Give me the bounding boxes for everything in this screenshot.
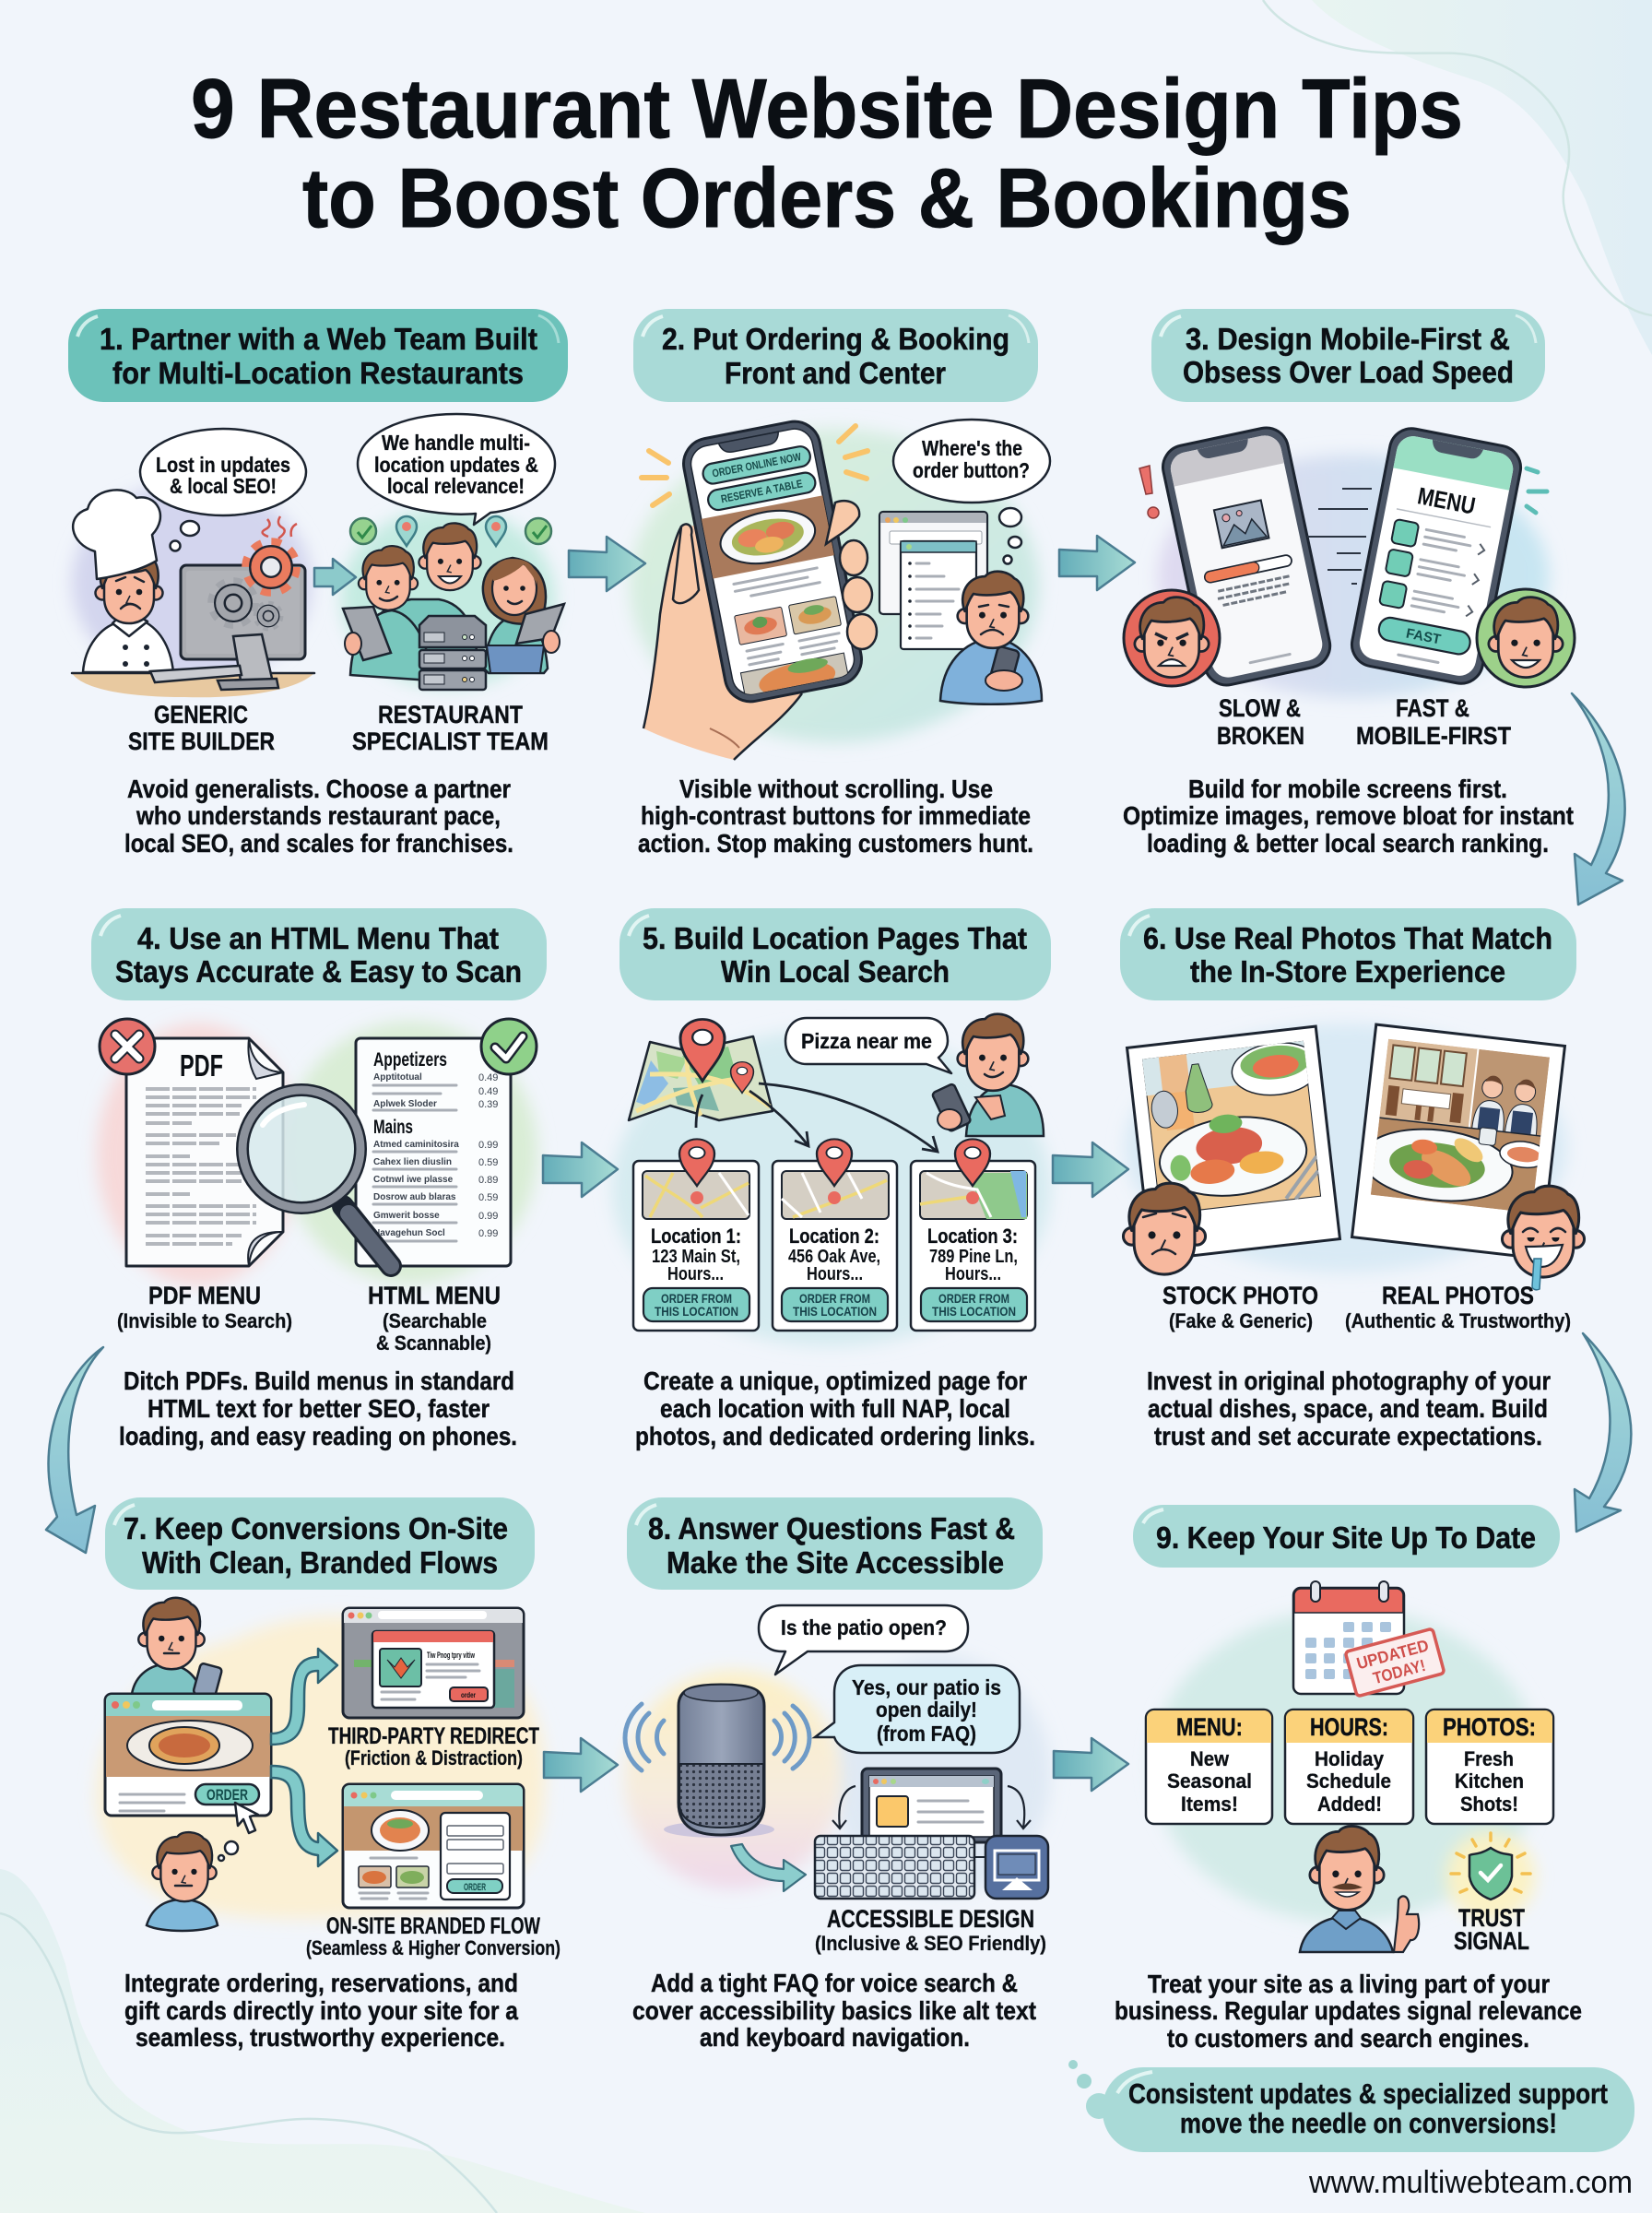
location card 1: Hours...	[667, 1264, 724, 1284]
heading pill 2	[633, 309, 1038, 402]
illustration: HTML menu: 0.59	[478, 1192, 498, 1203]
illustration: on-site branded flow window	[343, 1784, 524, 1908]
labels: third-party redirect: THIRD-PARTY REDIRECT	[328, 1723, 539, 1749]
location card 3: 789 Pine Ln,	[929, 1247, 1018, 1267]
icon: calendar with updated stamp: UPDATED	[1354, 1636, 1431, 1673]
body text 4: loading, and easy reading on phones.	[119, 1422, 517, 1450]
card: photos update	[1426, 1710, 1553, 1824]
corner decoration: bottom left	[0, 1869, 645, 2213]
heading pill 7	[105, 1497, 535, 1590]
body text 6: Invest in original photography of your	[1147, 1367, 1551, 1395]
labels: stock vs real	[1162, 1282, 1571, 1332]
labels: slow vs fast: BROKEN	[1217, 722, 1304, 750]
labels: slow vs fast: MOBILE-FIRST	[1356, 722, 1511, 750]
heading pill 1: 1. Partner with a Web Team Built	[100, 322, 537, 356]
body text 4	[119, 1367, 517, 1450]
labels: stock vs real: REAL PHOTOS	[1382, 1282, 1534, 1309]
body text 5	[635, 1367, 1035, 1450]
illustration: map with pins	[629, 1019, 773, 1120]
body text 1: who understands restaurant pace,	[136, 801, 501, 830]
body text 6	[1147, 1367, 1551, 1450]
title: to Boost Orders & Bookings	[302, 152, 1351, 245]
labels: slow vs fast	[1217, 694, 1511, 750]
illustration: HTML menu: 0.99	[478, 1228, 498, 1239]
heading pill 5: Win Local Search	[721, 954, 950, 988]
illustration: HTML menu: Dosrow aub blaras	[373, 1192, 456, 1202]
card: photos update: Shots!	[1460, 1793, 1518, 1816]
illustration: fast mobile-first phone: MENU	[1415, 481, 1478, 520]
illustration: HTML menu: 0.89	[478, 1175, 498, 1186]
body text 5: each location with full NAP, local	[660, 1394, 1010, 1423]
body text 6: trust and set accurate expectations.	[1154, 1422, 1542, 1450]
label: trust signal: SIGNAL	[1454, 1927, 1529, 1955]
labels: third-party redirect: (Friction & Distraction)	[345, 1746, 523, 1769]
speech bubble: lost in updates: & local SEO!	[170, 474, 277, 498]
labels: generic vs specialist: SPECIALIST TEAM	[352, 728, 549, 755]
heading pill 9	[1133, 1505, 1560, 1568]
illustration: smart speaker	[625, 1685, 809, 1838]
heading pill 3	[1151, 309, 1545, 402]
body text 1: Avoid generalists. Choose a partner	[127, 775, 511, 803]
card: menu update: Seasonal	[1167, 1769, 1252, 1793]
location card 3	[911, 1139, 1035, 1331]
icon: red x	[100, 1019, 155, 1074]
labels: PDF vs HTML: (Invisible to Search)	[117, 1309, 292, 1332]
illustration: person searching on phone	[932, 1014, 1044, 1136]
curved arrow: step 4 to 7	[46, 1347, 103, 1553]
body text 6: actual dishes, space, and team. Build	[1148, 1394, 1548, 1423]
card: menu update: MENU:	[1176, 1713, 1243, 1741]
illustration: customer with phone	[132, 1598, 222, 1698]
title	[191, 63, 1463, 245]
icon: magnifying glass	[242, 1090, 391, 1266]
heading pill 5: 5. Build Location Pages That	[643, 921, 1027, 955]
icon: trust shield	[1451, 1833, 1530, 1899]
body text 1	[124, 775, 513, 858]
illustration: HTML menu: Mains	[373, 1117, 413, 1138]
heading pill 2: Front and Center	[725, 356, 946, 390]
speech bubble: pizza near me	[785, 1018, 951, 1073]
speech bubble: yes the patio is open: Yes, our patio is	[852, 1675, 1001, 1699]
body text 4: Ditch PDFs. Build menus in standard	[124, 1367, 514, 1395]
location card 3: THIS LOCATION	[932, 1304, 1016, 1319]
illustration: PDF menu document	[126, 1038, 283, 1266]
location card 1: 123 Main St,	[652, 1247, 740, 1267]
labels: stock vs real: (Authentic & Trustworthy)	[1345, 1309, 1571, 1332]
illustration: HTML menu: Gmwerit bosse	[373, 1211, 440, 1221]
heading pill 4	[91, 908, 547, 1000]
heading pill 4: 4. Use an HTML Menu That	[137, 921, 499, 955]
arrow: speaker to accessible design	[731, 1844, 806, 1891]
speech bubble: lost in updates: Lost in updates	[156, 453, 290, 477]
panel 7	[105, 1497, 560, 2052]
illustration: restaurant specialist team	[343, 516, 564, 690]
body text 3: Optimize images, remove bloat for instant	[1123, 801, 1574, 830]
heading pill 2: 2. Put Ordering & Booking	[662, 322, 1009, 356]
panel 3	[1123, 309, 1575, 858]
labels: slow vs fast: SLOW &	[1219, 694, 1301, 722]
speech bubble: we handle multi-location: local relevance!	[387, 474, 525, 498]
curved arrow: step 6 to 9	[1575, 1333, 1631, 1532]
illustration: third-party redirect window	[343, 1608, 524, 1718]
speech bubble: yes the patio is open: (from FAQ)	[877, 1722, 976, 1746]
illustration: hand holding phone: RESERVE A TABLE	[720, 477, 804, 505]
body text 7: Integrate ordering, reservations, and	[124, 1969, 518, 1997]
location card 1: Location 1:	[651, 1225, 741, 1248]
labels: generic vs specialist: RESTAURANT	[378, 701, 523, 728]
illustration: HTML menu: Cotnwl iwe plasse	[373, 1175, 454, 1185]
illustration: accessible design devices	[815, 1769, 1048, 1899]
illustration: HTML menu: 0.99	[478, 1211, 498, 1222]
body text 4: HTML text for better SEO, faster	[148, 1394, 490, 1423]
labels: PDF vs HTML: HTML MENU	[368, 1282, 501, 1309]
body text 2: action. Stop making customers hunt.	[638, 829, 1033, 858]
panel 5	[620, 908, 1051, 1450]
illustration: on-site branded flow window: ORDER	[464, 1882, 486, 1893]
illustration: restaurant page with order button: ORDER	[206, 1786, 248, 1804]
arrows: map to location cards	[696, 1083, 938, 1152]
illustration: HTML menu	[356, 1038, 511, 1266]
label: trust signal	[1454, 1904, 1529, 1955]
labels: generic vs specialist: SITE BUILDER	[128, 728, 275, 755]
arrow: step 4 to 5	[543, 1142, 618, 1197]
icon: calendar with updated stamp	[1293, 1581, 1445, 1697]
body text 7: seamless, trustworthy experience.	[136, 2023, 505, 2052]
body text 2: Visible without scrolling. Use	[679, 775, 993, 803]
labels: stock vs real: STOCK PHOTO	[1162, 1282, 1318, 1309]
callout: consistent updates: move the needle on conversions!	[1180, 2107, 1557, 2139]
speech bubble: where's the order button: Where's the	[922, 436, 1022, 460]
labels: third-party redirect	[328, 1723, 539, 1769]
heading pill 7: 7. Keep Conversions On-Site	[124, 1511, 508, 1545]
heading pill 1	[68, 309, 568, 402]
heading pill 3: 3. Design Mobile-First &	[1186, 322, 1510, 356]
body text 3: Build for mobile screens first.	[1188, 775, 1507, 803]
labels: PDF vs HTML: PDF MENU	[148, 1282, 261, 1309]
illustration: stock photo print	[1127, 1026, 1339, 1260]
panel 1	[68, 309, 568, 858]
body text 8: cover accessibility basics like alt text	[632, 1996, 1036, 2025]
labels: generic vs specialist	[128, 701, 549, 755]
card: hours update: Added!	[1317, 1793, 1382, 1816]
illustration: HTML menu: Aplwek Sloder	[373, 1099, 437, 1109]
labels: stock vs real: (Fake & Generic)	[1169, 1309, 1313, 1332]
labels: PDF vs HTML: (Searchable	[383, 1309, 487, 1332]
illustration: third-party redirect window: order	[461, 1691, 476, 1699]
heading pill 3: Obsess Over Load Speed	[1183, 355, 1514, 389]
body text 2: high-contrast buttons for immediate	[641, 801, 1031, 830]
illustration: HTML menu: 0.49	[478, 1072, 498, 1083]
arrow: step 1 to 2	[569, 537, 645, 591]
heading pill 8: Make the Site Accessible	[667, 1545, 1004, 1580]
arrow: step 2 to 3	[1059, 536, 1135, 590]
location card 2	[773, 1139, 897, 1331]
labels: PDF vs HTML	[117, 1282, 501, 1355]
speech bubble: is the patio open: Is the patio open?	[781, 1615, 947, 1639]
location card 3: Location 3:	[927, 1225, 1018, 1248]
panel 2	[633, 309, 1050, 858]
icon: green check	[481, 1019, 537, 1074]
body text 3: loading & better local search ranking.	[1147, 829, 1549, 858]
illustration: HTML menu: Apptitotual	[373, 1072, 422, 1083]
body text 1: local SEO, and scales for franchises.	[124, 829, 513, 858]
flow arrows	[271, 1649, 337, 1866]
labels: on-site branded flow: (Seamless & Higher Conversion)	[306, 1936, 560, 1959]
card: photos update: Kitchen	[1455, 1769, 1524, 1793]
website url: www.multiwebteam.com	[1308, 2165, 1633, 2200]
location card 3: ORDER FROM	[938, 1291, 1009, 1306]
heading pill 1: for Multi-Location Restaurants	[112, 356, 524, 390]
callout: consistent updates	[1068, 2060, 1634, 2152]
body text 3	[1123, 775, 1574, 858]
illustration: third-party redirect window: Tiw Pnog tpry vitiw	[427, 1651, 476, 1660]
body text 7: gift cards directly into your site for a	[124, 1996, 518, 2025]
card: menu update	[1146, 1710, 1272, 1824]
card: hours update	[1285, 1710, 1413, 1824]
labels: PDF vs HTML: & Scannable)	[376, 1331, 491, 1355]
body text 8: and keyboard navigation.	[700, 2023, 970, 2052]
location card 3: Hours...	[945, 1264, 1001, 1284]
arrow: generic to specialist	[314, 559, 356, 595]
illustration: HTML menu: 0.99	[478, 1140, 498, 1151]
icon: calendar with updated stamp: TODAY!	[1371, 1656, 1427, 1687]
card: hours update: Holiday	[1315, 1747, 1385, 1770]
heading pill 4: Stays Accurate & Easy to Scan	[115, 954, 522, 988]
illustration: thinking customer	[147, 1832, 238, 1931]
watercolor blobs behind illustrations	[72, 429, 1567, 1923]
body text 9	[1115, 1970, 1582, 2053]
illustration: restaurant page with order button	[105, 1694, 271, 1833]
speech bubble: where's the order button: order button?	[913, 458, 1030, 482]
illustration: confused customer with cluttered site	[879, 512, 1042, 704]
face: delighted with real photos	[1502, 1186, 1585, 1290]
illustration: HTML menu: 0.59	[478, 1157, 498, 1168]
speech bubble: is the patio open	[759, 1605, 968, 1675]
speech bubble: we handle multi-location: location updates &	[374, 453, 538, 477]
illustration: HTML menu: Atmed caminitosira	[373, 1140, 459, 1150]
arrow: step 5 to 6	[1053, 1142, 1128, 1197]
heading pill 6: the In-Store Experience	[1190, 954, 1505, 988]
location card 2: Hours...	[807, 1264, 863, 1284]
body text 9: Treat your site as a living part of your	[1148, 1970, 1550, 1998]
location card 2: ORDER FROM	[799, 1291, 870, 1306]
illustration: HTML menu: Navagehun Socl	[373, 1228, 445, 1238]
curved arrow: step 3 to 6	[1572, 693, 1625, 905]
heading pill 7: With Clean, Branded Flows	[142, 1545, 498, 1580]
heading pill 5	[620, 908, 1051, 1000]
body text 2	[638, 775, 1033, 858]
card: hours update: HOURS:	[1310, 1713, 1388, 1741]
illustration: HTML menu: Cahex lien diuslin	[373, 1157, 452, 1167]
body text 5: photos, and dedicated ordering links.	[635, 1422, 1035, 1450]
illustration: PDF menu document: PDF	[180, 1048, 223, 1083]
heading pill 8	[627, 1497, 1043, 1590]
card: menu update: New	[1190, 1747, 1230, 1770]
illustration: HTML menu: 0.49	[478, 1086, 498, 1097]
speech bubble: we handle multi-location: We handle multi-	[382, 431, 530, 455]
speech bubble: yes the patio is open: open daily!	[876, 1698, 977, 1722]
illustration: HTML menu: 0.39	[478, 1099, 498, 1110]
body text 5: Create a unique, optimized page for	[643, 1367, 1027, 1395]
speech bubble: we handle multi-location	[358, 414, 555, 525]
labels: slow vs fast: FAST &	[1396, 694, 1469, 722]
illustration: chef with generic site builder	[72, 490, 314, 697]
location card 2: 456 Oak Ave,	[788, 1247, 880, 1267]
panel 6	[1120, 908, 1585, 1450]
labels: generic vs specialist: GENERIC	[154, 701, 248, 728]
body text 9: business. Regular updates signal relevance	[1115, 1996, 1582, 2025]
arrow: step 8 to 9	[1054, 1738, 1128, 1791]
illustration: fast mobile-first phone	[1348, 425, 1575, 687]
location card 1	[633, 1139, 759, 1331]
speech bubble: yes the patio is open	[815, 1665, 1020, 1753]
speech bubble: lost in updates	[140, 429, 306, 551]
heading pill 6: 6. Use Real Photos That Match	[1143, 921, 1552, 955]
illustration: real photo print	[1352, 1024, 1564, 1259]
illustration: HTML menu: Appetizers	[373, 1049, 447, 1071]
card: hours update: Schedule	[1306, 1769, 1391, 1793]
title: 9 Restaurant Website Design Tips	[191, 63, 1463, 156]
illustration: fast mobile-first phone: FAST	[1405, 625, 1442, 647]
speech bubble: pizza near me: Pizza near me	[801, 1029, 932, 1053]
card: menu update: Items!	[1181, 1793, 1238, 1816]
speech bubble: where's the order button	[893, 420, 1050, 564]
labels: accessible design: ACCESSIBLE DESIGN	[827, 1905, 1034, 1933]
labels: on-site branded flow	[306, 1913, 560, 1959]
card: photos update: Fresh	[1464, 1747, 1514, 1770]
heading pill 8: 8. Answer Questions Fast &	[648, 1511, 1015, 1545]
illustration: owner thumbs up	[1300, 1826, 1419, 1952]
card: photos update: PHOTOS:	[1443, 1713, 1536, 1741]
labels: accessible design	[815, 1905, 1046, 1955]
location card 2: Location 2:	[789, 1225, 879, 1248]
illustration: hand holding phone: ORDER ONLINE NOW	[711, 450, 803, 480]
corner decoration: top right	[1263, 0, 1652, 355]
panel 9	[1068, 1505, 1634, 2200]
labels: on-site branded flow: ON-SITE BRANDED FLOW	[326, 1913, 540, 1939]
heading pill 6	[1120, 908, 1576, 1000]
illustration: slow broken phone	[1124, 424, 1372, 689]
body text 7	[124, 1969, 518, 2052]
label: trust signal: TRUST	[1458, 1904, 1525, 1932]
body text 8: Add a tight FAQ for voice search &	[651, 1969, 1018, 1997]
illustration: hand holding phone	[642, 417, 877, 760]
panel 8	[625, 1497, 1048, 2052]
labels: accessible design: (Inclusive & SEO Friendly)	[815, 1932, 1046, 1955]
heading pill 9: 9. Keep Your Site Up To Date	[1156, 1521, 1536, 1555]
panel 4	[91, 908, 547, 1450]
face: unhappy with stock photo	[1123, 1183, 1206, 1274]
body text 9: to customers and search engines.	[1167, 2024, 1529, 2053]
location card 1: ORDER FROM	[661, 1291, 732, 1306]
body text 8	[632, 1969, 1036, 2052]
location card 2: THIS LOCATION	[793, 1304, 877, 1319]
arrow: step 7 to 8	[544, 1738, 618, 1792]
location card 1: THIS LOCATION	[655, 1304, 738, 1319]
